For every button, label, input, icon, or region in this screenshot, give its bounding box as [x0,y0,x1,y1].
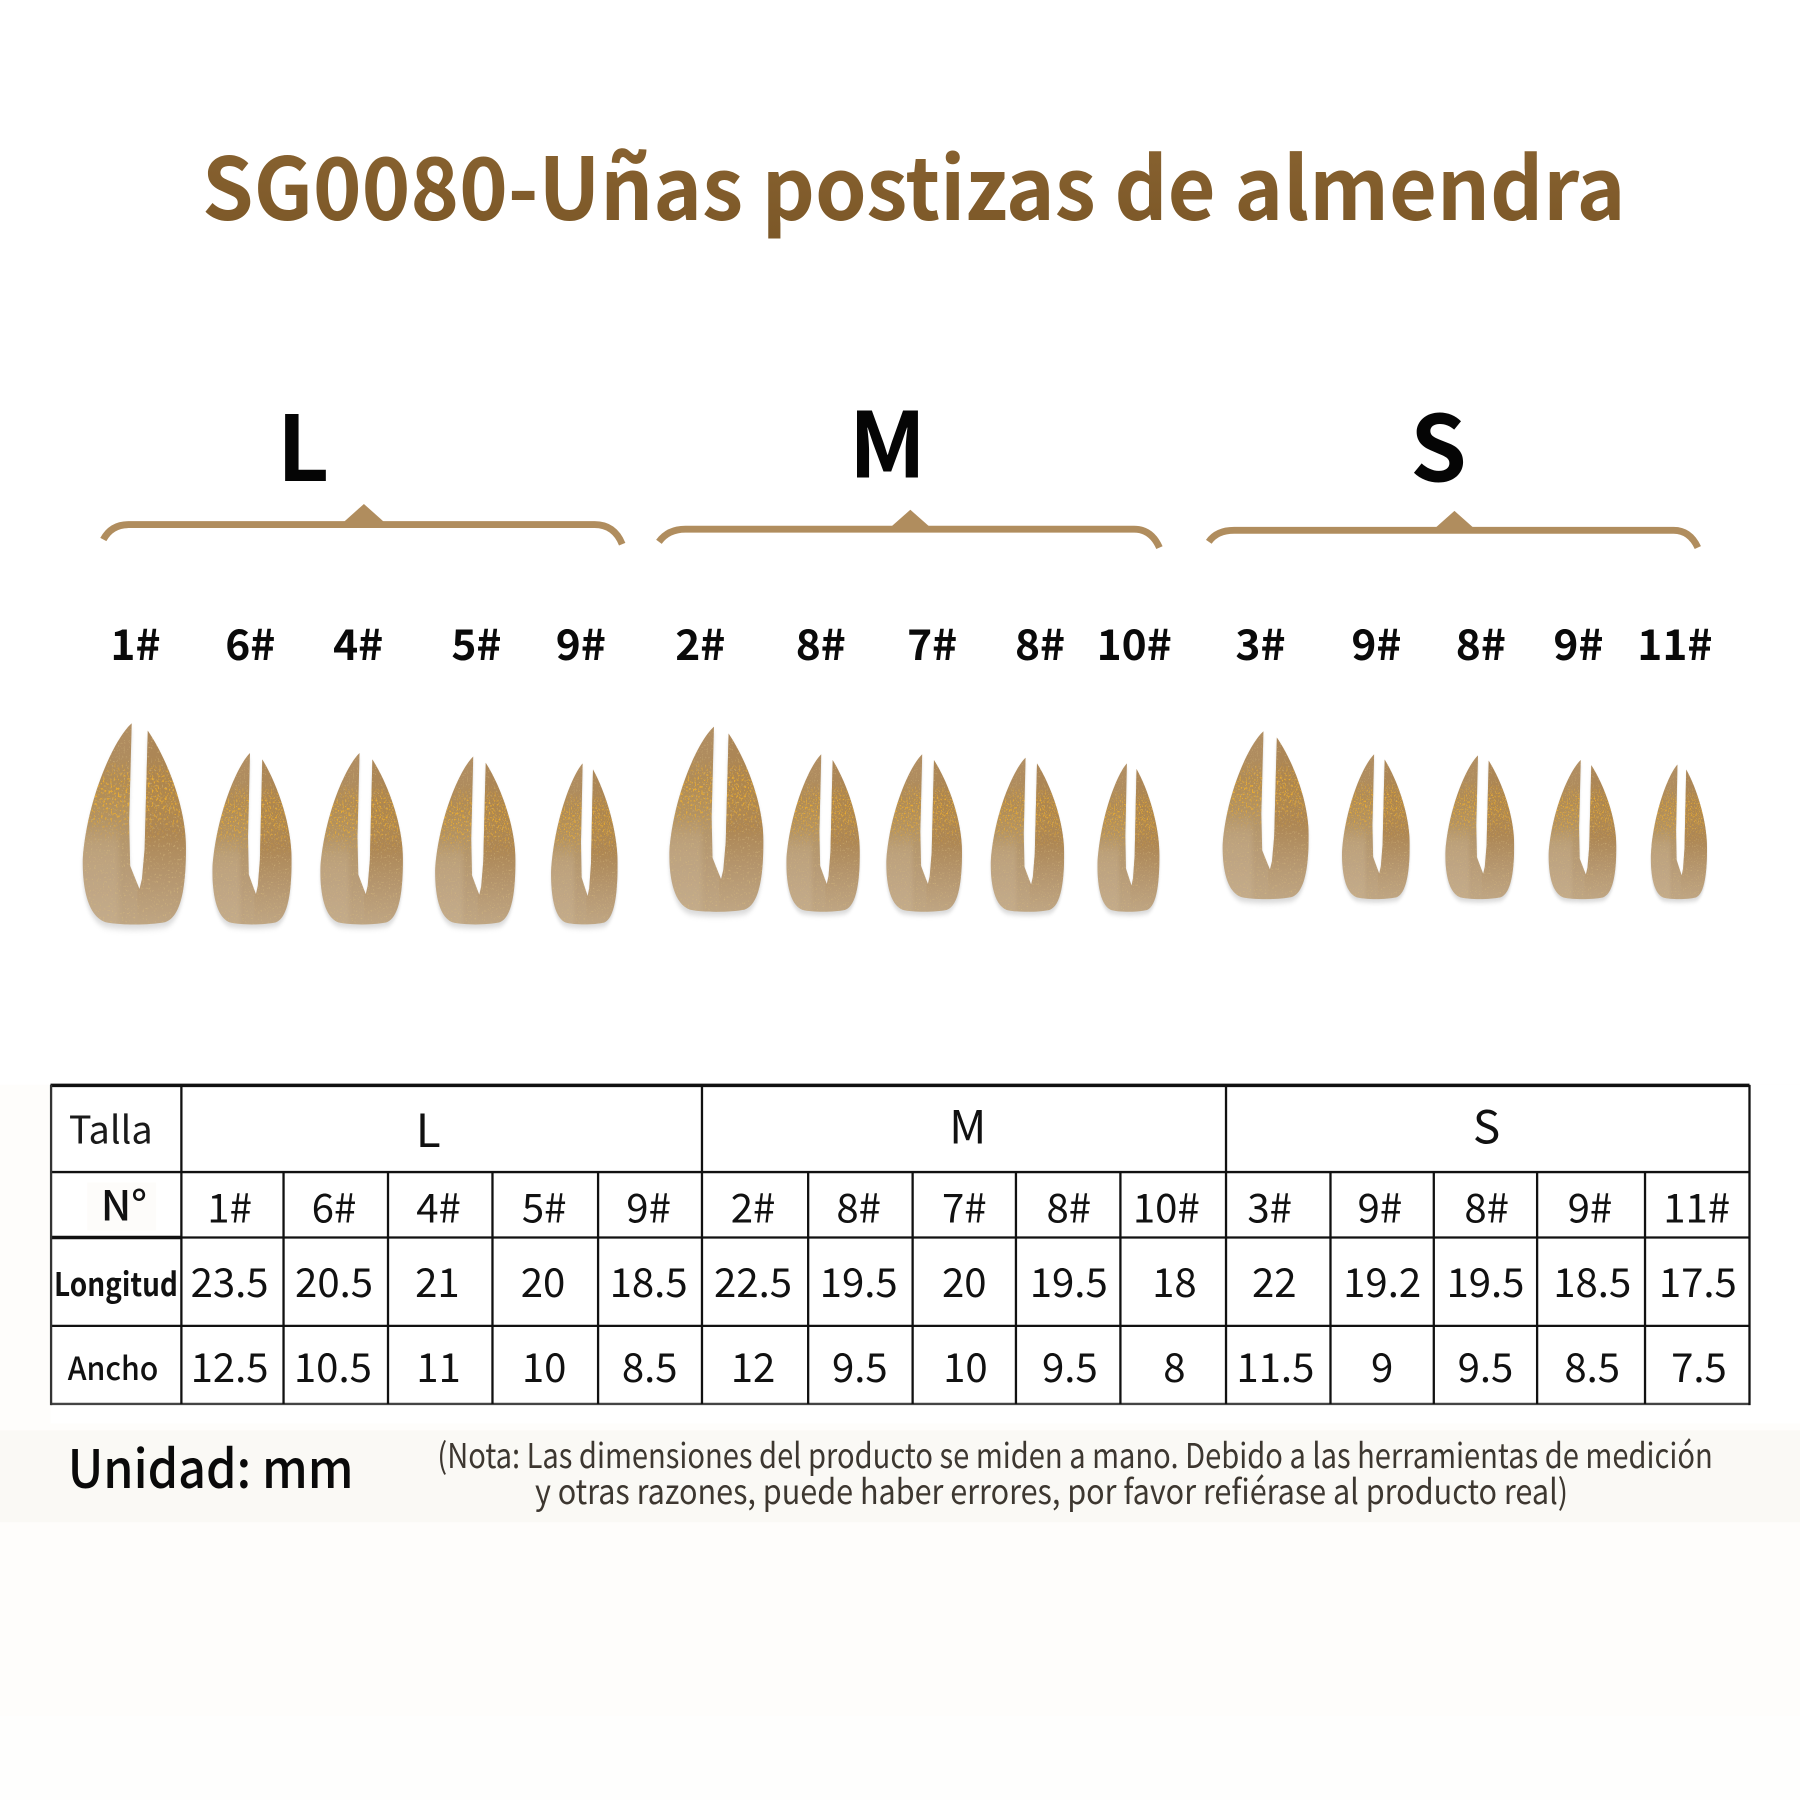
row: N°: 5# [522,1176,566,1235]
size table [51,1085,1749,1405]
nail number labels: 8# [796,612,846,673]
row: N°: N° [101,1172,147,1232]
row: Ancho: 9.5 [832,1335,888,1394]
row: Ancho: 9 [1371,1335,1393,1394]
bracket: S [1209,511,1698,548]
row: Longitud: 22.5 [714,1250,792,1309]
row: Talla [69,1091,1500,1161]
row: N° [87,1172,1730,1235]
row: Ancho: 8 [1163,1335,1186,1394]
nails: M group [655,725,1160,930]
row: Ancho [68,1335,1727,1394]
row: N°: 9# [1358,1176,1402,1235]
nail number labels: 8# [1456,612,1506,673]
row: Longitud: 20.5 [295,1250,373,1309]
row: Longitud: 20 [521,1250,565,1309]
nail number labels: 9# [1351,612,1401,673]
title: SG0080-Uñas postizas de almendra [202,120,1626,245]
row: Longitud: 21 [415,1250,460,1309]
nail number labels: 3# [1235,612,1286,673]
row: N°: 8# [836,1176,881,1235]
row: Ancho: 11.5 [1236,1335,1314,1394]
row: N°: 9# [626,1176,671,1235]
row: Ancho: 12 [731,1335,775,1394]
group heading: L: L [277,377,329,508]
nail number labels: 4# [333,612,383,673]
row: N°: 2# [731,1176,775,1235]
row: Longitud: 19.5 [1030,1250,1108,1309]
nail number labels: 2# [675,612,725,673]
row: Longitud: 18.5 [610,1250,688,1309]
nail number labels: 6# [225,612,275,673]
row: Longitud: 22 [1252,1250,1297,1309]
row: Ancho: 10 [522,1335,566,1394]
unit label: Unidad: mm [68,1428,354,1504]
row: Ancho: 10.5 [294,1335,372,1394]
row: Longitud: 19.2 [1343,1250,1421,1309]
row: Longitud: 23.5 [191,1250,269,1309]
row: N°: 8# [1046,1176,1091,1235]
row: N°: 4# [416,1176,461,1235]
row: Longitud: 18.5 [1553,1250,1631,1309]
nail number labels: 9# [1553,612,1604,673]
row: Longitud: 20 [942,1250,987,1309]
nails: L group [67,721,618,944]
row: N°: 6# [312,1176,356,1235]
row: Ancho: 11 [416,1335,461,1394]
row: N°: 3# [1247,1176,1292,1235]
row: Talla: Talla [69,1099,153,1154]
row: N°: 11# [1663,1176,1730,1235]
row: Ancho: 8.5 [622,1335,678,1394]
nails: S group [1210,730,1708,916]
measurement note [437,1428,1713,1514]
nail number labels: 7# [907,612,957,673]
row: Longitud [54,1250,1737,1309]
nail number labels: 9# [556,612,606,673]
row: N°: 9# [1568,1176,1612,1235]
nail number labels: 8# [1015,612,1065,673]
row: Longitud: 19.5 [1446,1250,1524,1309]
row: Talla: S [1473,1091,1500,1157]
bracket: L [103,504,622,544]
row: Ancho: 12.5 [191,1335,269,1394]
group heading: M: M [849,374,926,505]
row: Ancho: 7.5 [1671,1335,1727,1394]
nail number labels: 10# [1097,612,1172,673]
bracket: M [659,510,1159,548]
row: N°: 7# [942,1176,987,1235]
row: Ancho: 10 [943,1335,988,1394]
row: Ancho: 9.5 [1458,1335,1513,1394]
row: Talla: M [949,1091,986,1157]
row: Longitud: 17.5 [1659,1250,1737,1309]
row: Ancho: Ancho [68,1344,158,1390]
row: N°: 10# [1133,1176,1200,1235]
row: Longitud: Longitud [54,1260,178,1306]
nail number labels: 1# [110,612,161,673]
row: Talla: L [416,1095,441,1161]
row: N°: 1# [207,1176,252,1235]
nail number labels: 11# [1637,612,1712,673]
row: Ancho: 9.5 [1042,1335,1098,1394]
row: Longitud: 18 [1152,1250,1197,1309]
nail number labels: 5# [451,612,501,673]
group heading: S: S [1410,377,1467,508]
nail number labels [110,612,1712,673]
row: Ancho: 8.5 [1564,1335,1620,1394]
measurement note: y otras razones, puede haber errores, por favor refiérase al producto real) [535,1464,1568,1514]
row: Longitud: 19.5 [820,1250,898,1309]
row: N°: 8# [1464,1176,1509,1235]
